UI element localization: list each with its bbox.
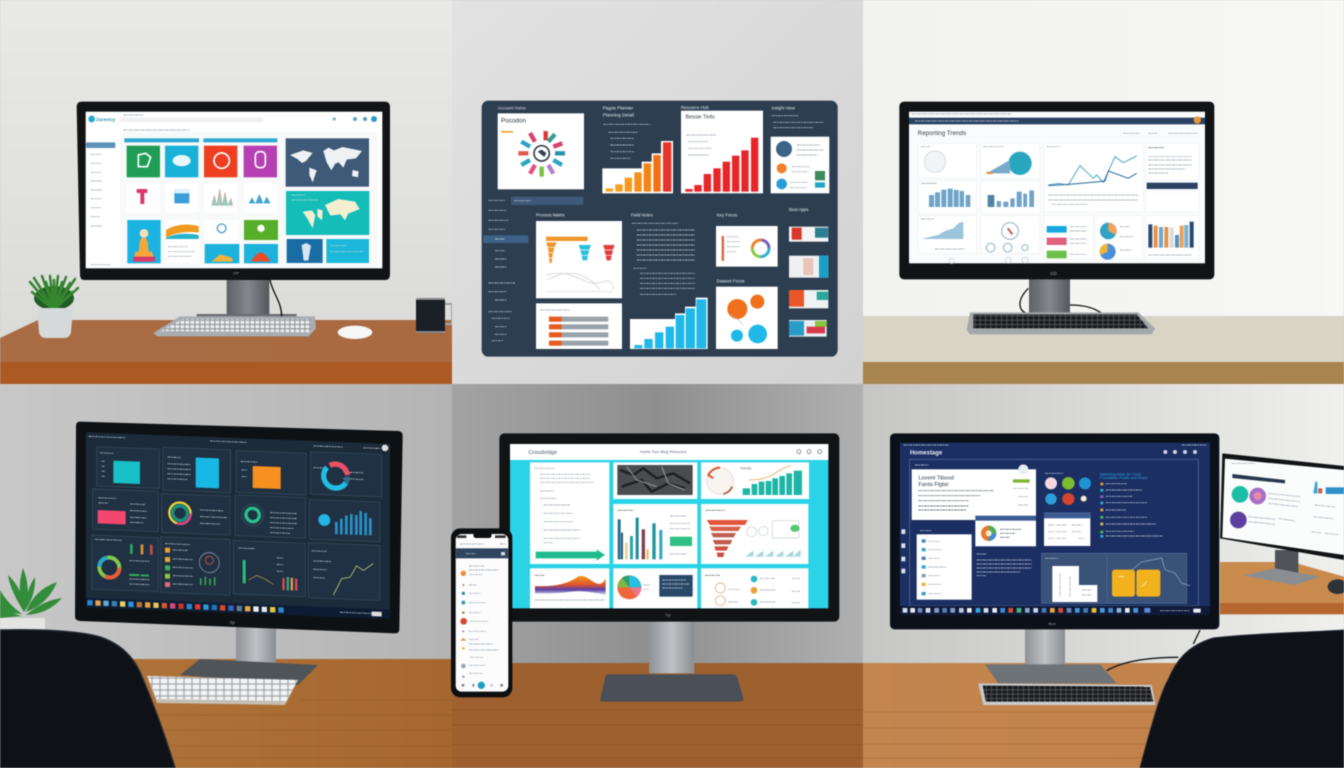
scene: top-left workstation: HP — [233, 270, 239, 275]
side rail icons — [901, 529, 905, 573]
chart: rainbow ring — [169, 502, 191, 524]
scene: bottom-left workstation — [0, 384, 452, 768]
panel: column chart — [613, 504, 697, 564]
keyboard — [967, 312, 1155, 334]
dashboard wall panel: Key Focus — [717, 213, 737, 218]
keyboard — [147, 676, 298, 705]
scene: top-right workstation: CO — [1050, 271, 1057, 276]
dashboard wall panel: Pagos Planner — [603, 106, 634, 111]
card: hero text: Fanta Flgtal — [918, 482, 948, 488]
chair — [0, 630, 175, 768]
scene: bottom-centre workstation with phone: hp — [666, 613, 671, 618]
taskbar — [900, 606, 1210, 615]
card: colourful logo — [975, 516, 1036, 546]
sidebar: dropdown and navigation — [483, 197, 583, 341]
screen: analytics dashboard — [909, 112, 1205, 264]
scene: bottom-right workstation — [863, 384, 1344, 768]
phone tab bar — [462, 682, 503, 689]
card: hero text — [912, 464, 1036, 520]
panel: funnel — [701, 504, 808, 564]
panel: teal bars with gauge: Trends — [740, 466, 751, 470]
monitor stand — [600, 620, 743, 702]
card: radial diagram — [498, 113, 584, 189]
desk: wood — [452, 663, 863, 768]
dashboard wall panel: Account Home — [498, 106, 527, 111]
monitor stand — [985, 628, 1117, 683]
panel grid — [92, 443, 382, 601]
card: ring diagram — [986, 223, 1028, 252]
monitor stand and cable — [197, 279, 297, 321]
world map tile: slate — [286, 138, 369, 187]
card: hero text: Lovent Tibood — [918, 475, 954, 481]
chart: blue column cluster — [318, 509, 372, 535]
photo tiles — [287, 239, 369, 263]
partial lower row — [949, 257, 1028, 264]
dashboard wall panel: Best Apps — [789, 207, 808, 212]
template tiles — [127, 146, 278, 263]
tile: cyan — [196, 457, 219, 488]
cables — [1107, 630, 1200, 671]
scene: top-left workstation — [0, 0, 452, 384]
screen: light dashboard: Home Tour Blog Resource — [640, 449, 687, 454]
chart: rising area bars — [921, 219, 965, 249]
dashboard wall panel: Dataset Focus — [717, 279, 745, 284]
chart: cyan bars — [630, 298, 708, 349]
desk: wood top — [0, 320, 452, 384]
small table card — [1044, 513, 1090, 546]
world map tile: teal — [286, 191, 369, 235]
monitor stand and cables — [1020, 278, 1102, 313]
card: funnels and area chart — [536, 221, 622, 298]
screen: analytics dashboard: Reporting Trends — [918, 130, 966, 137]
panel: text with arrow — [530, 462, 609, 564]
panel: pie with note — [613, 568, 697, 608]
side desk — [1220, 562, 1344, 614]
card: profile icons — [771, 137, 829, 193]
chart: trend with coloured bars — [238, 548, 297, 591]
scene: top-right workstation — [863, 0, 1344, 384]
thumbnail column — [789, 227, 828, 337]
glass panel: yellow tiles and chart — [1042, 553, 1190, 603]
second monitor stand — [1243, 550, 1320, 585]
coloured icon grid — [1045, 477, 1091, 505]
card: bubble chart — [716, 287, 778, 349]
scene: top-centre floating dashboard — [452, 0, 863, 384]
screen: design gallery: Zarency — [96, 117, 115, 123]
chart: dashed ring — [199, 552, 219, 586]
monitor bezel — [890, 433, 1219, 629]
chart: multicolour columns — [1148, 222, 1194, 255]
panel: texture photo — [613, 462, 697, 499]
tile: pink — [98, 510, 126, 524]
desk: beige top — [863, 316, 1344, 384]
tile: orange — [253, 466, 281, 489]
desk: wood — [863, 663, 1344, 768]
panel: teal bars with gauge — [701, 462, 809, 499]
card: teal gauge — [983, 147, 1032, 175]
monitor bezel — [499, 433, 839, 622]
chart: orange-red bars — [602, 141, 673, 193]
screen: design gallery — [86, 112, 382, 268]
card: horizontal bar table — [536, 303, 622, 349]
pie charts — [1100, 223, 1133, 260]
chart: light blue bars — [921, 183, 1034, 207]
icon: dark mug — [416, 298, 452, 333]
sidebar navigation — [86, 142, 115, 265]
card: line drawing circle — [921, 147, 946, 183]
phone list items — [460, 566, 499, 678]
dashboard wall panel: Resource Hub — [681, 105, 709, 110]
text block — [632, 223, 695, 294]
phone — [451, 528, 512, 697]
chart: line chart — [1047, 147, 1138, 204]
dashboard wall panel — [482, 101, 838, 357]
tile: teal — [113, 461, 140, 484]
chart: red bars card: Bessie Tinfo — [686, 115, 715, 121]
text block — [977, 554, 1032, 576]
monitor bezel — [899, 102, 1214, 279]
chart: green ring — [242, 504, 263, 526]
keyboard — [153, 316, 316, 336]
screen: navy dashboard: Homestage — [910, 451, 943, 457]
scene: bottom-left workstation: hp — [230, 620, 235, 625]
icon: potted plant — [0, 568, 62, 630]
icon: potted plant — [30, 276, 78, 338]
scene: bottom-centre workstation with phone — [451, 384, 863, 768]
screen: light dashboard: Crossbridge — [528, 450, 557, 456]
text card — [1147, 148, 1198, 189]
chart: rising line — [312, 551, 373, 597]
chart: multicolour donut — [99, 557, 119, 578]
dashboard wall panel: Field Notes — [631, 213, 653, 218]
icon list — [165, 544, 193, 588]
chair — [1140, 630, 1344, 768]
panel: process icons — [701, 568, 808, 608]
card: radial diagram: Pocodon — [501, 118, 526, 125]
card: list — [917, 531, 972, 600]
screen: light dashboard — [510, 444, 828, 608]
dashboard wall panel: Planning Detail — [603, 112, 634, 117]
icon: mouse — [338, 326, 372, 339]
legend columns — [129, 544, 153, 577]
monitor bezel — [77, 102, 390, 280]
keyboard — [978, 683, 1156, 705]
feature list — [1100, 472, 1162, 538]
dashboard wall panel: Process Matrix — [536, 213, 565, 218]
chart: cyan and red donut — [324, 464, 348, 489]
card: donut — [716, 226, 778, 267]
feature list: Foundation Profile and Share — [1100, 476, 1148, 480]
chart: red bars card — [681, 111, 763, 193]
desk: wood — [0, 659, 452, 768]
dashboard wall panel: Insight View — [772, 106, 796, 111]
icon: side mouse — [1328, 579, 1344, 594]
colour buttons — [1047, 226, 1087, 258]
monitor stand — [180, 625, 318, 685]
panel: stream chart — [530, 568, 609, 608]
monitor bezel — [75, 422, 403, 633]
screen: dark dashboard — [86, 432, 390, 619]
second monitor — [1220, 453, 1344, 560]
screen: navy dashboard — [900, 443, 1210, 615]
scene: bottom-right workstation: Asus — [1048, 622, 1056, 626]
feature list: Marketing Base 2D Chart — [1100, 472, 1141, 476]
taskbar — [86, 598, 390, 619]
